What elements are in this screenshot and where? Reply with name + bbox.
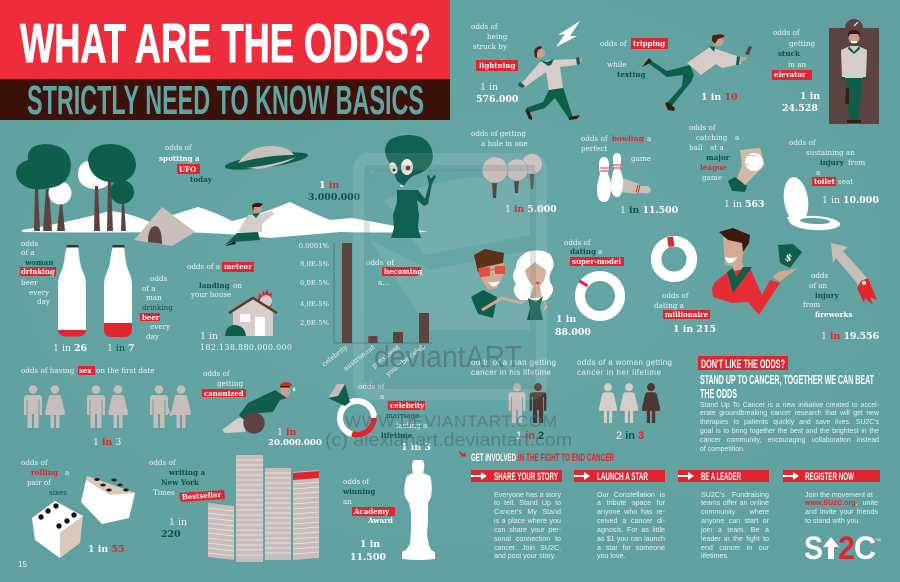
text: bestseller odds: odds of [149,458,177,467]
text: toilet odds: odds of [789,138,817,147]
text: academy award odds: odds [343,477,361,486]
text: tripping odds: 1 in 10 [701,92,738,103]
text: fireworks odds: of an [809,281,828,290]
illustration: firework rocket [831,243,877,305]
text: dice odds: a [65,468,70,477]
text: woman drinking beer: every [29,288,50,297]
text: lightning odds: being [487,32,508,41]
text: man drinking beer: odds [150,274,168,283]
text: meteor odds: on [233,281,242,290]
header bar: be a leader [678,470,769,483]
text: fireworks odds [803,271,880,342]
text: woman drinking beer: woman [24,258,54,267]
text: celebrity marriage odds: celebrity [390,401,425,410]
bar chart: odds of becoming: austronaut [342,343,376,373]
text: academy award odds: winning [342,487,375,496]
text: UFO odds: 3.000.000 [308,192,361,203]
text: bowling odds: odds of [581,134,609,143]
illustration: golf balls on tees [482,154,542,198]
text block: share your story: cancer. Join SU2C, [494,544,561,552]
bar chart: odds of becoming: 8,0E-5% [300,260,330,268]
text block: share your story [494,490,561,560]
text: baseball odds: league [700,163,727,172]
text: dice odds: pair of [27,478,52,487]
text block: be a leader: anyone can start or [701,517,769,525]
text block: launch a star [597,490,665,560]
text block: launch a star: you love. [597,552,625,560]
text: fireworks odds: injury [815,291,840,300]
logo: SU2C: 2 [838,530,855,566]
text: academy award odds: of [362,477,370,486]
text: toilet odds [789,138,879,206]
text: super-model odds: 1 in [556,314,576,325]
text: 1 in 3: 1 in 3 [93,437,121,448]
text block: register now [805,490,878,525]
text block: register now: www.SU2C.org, unite [805,499,878,507]
watermark: deviantart logo frame [353,153,547,400]
heading: get involved: IN THE FIGHT TO END CANCER [518,452,614,464]
illustration: oscar statue [402,460,435,560]
text: becoming odds: a... [378,278,389,287]
text: super-model odds: super-model [572,257,621,266]
header bar: register now [783,470,880,483]
text: tripping odds: odds of [600,39,628,48]
header bar: register now: REGISTER NOW [805,471,854,483]
text block: share your story: can share your per- [494,526,561,534]
text: baseball odds: major [706,153,730,162]
illustration: dice [32,476,135,558]
text: celebrity marriage odds: 1 in 3 [401,442,431,453]
bar chart: odds of becoming: 4,0E-5% [300,300,330,308]
text: lightning odds: lightning [479,61,515,70]
text: woman drinking beer [20,239,87,354]
text: millionaire odds: 1 in 215 [673,324,716,335]
text: super-model odds: a [598,247,603,256]
illustration: man in elevator [829,19,879,124]
text block: be a leader: community where [701,508,769,516]
text: canonized odds: canonized [204,389,244,398]
text block: share your story: and post your story. [494,552,556,560]
text block: be a leader: SU2C's Fundraising [701,490,769,498]
illustration: alien [385,135,436,238]
text: bowling odds: a [647,134,652,143]
text: elevator odds: odds of [773,28,801,37]
text: UFO odds: UFO [179,165,196,174]
text: academy award odds: an [343,497,352,506]
text block: be a leader: teams offer an online [701,499,769,507]
text: UFO odds: 1 in [319,180,339,191]
text: bestseller odds [149,458,225,540]
text: toilet odds: sustaining an [806,148,855,157]
icon: UFO [224,146,309,173]
tent [134,207,195,246]
text: man drinking beer: of a [142,284,156,293]
icon: pair of people 3 [150,385,191,428]
bar chart: odds of becoming [299,242,432,379]
text: celebrity marriage odds: marriage [386,411,419,420]
illustration: donut millionaire [656,237,692,277]
header bar: share your story: SHARE YOUR STORY [494,471,558,483]
text: dice odds: odds of [21,458,49,467]
text: becoming odds [366,258,422,287]
text: meteor odds: your house [190,290,231,299]
text: becoming odds: of [387,258,395,267]
bar chart: odds of becoming: 0.0001% [299,242,330,250]
logo: SU2C: TM [875,537,881,542]
text: celebrity marriage odds [358,382,431,453]
text: academy award odds: 1 in [360,539,380,550]
text: toilet odds: toilet [814,177,836,186]
text: man drinking beer [107,274,173,354]
text block: launch a star: agnosis. For as little [597,526,665,534]
illustration: millionaire man with cash [712,228,802,315]
text: toilet odds: 1 in 10.000 [822,195,879,206]
heading: get involved: GET INVOLVED [471,452,516,464]
text: woman drinking beer: of a [21,248,35,257]
text: academy award odds: Award [367,516,393,525]
text: UFO odds [159,143,361,203]
text: woman drinking beer: day [37,297,51,306]
illustration: diamond ring [328,384,374,435]
text: bowling odds: perfect [581,144,607,153]
text: lightning odds [471,22,519,105]
text block: stand up to cancer paragraph: erate groundbreaking cancer research that will get new [700,410,879,417]
icon: pair of people 1 [24,385,65,428]
text: UFO odds: odds of [165,143,193,152]
text: super-model odds: dating [570,247,596,256]
text block: share your story: sonal connection to [494,535,561,543]
text: baseball odds: catching [696,133,728,142]
text: tripping odds: tripping [633,39,665,48]
header bar: launch a star [574,470,665,483]
bar chart: odds of becoming: celebrity [320,343,349,368]
text: elevator odds: 1 in [800,91,820,102]
text: UFO odds: spotting a [159,154,200,163]
text: page number: 15 [18,560,27,569]
text block: stand up to cancer paragraph [700,402,879,453]
text: millionaire odds [654,291,716,335]
text block: register now: to stand with you. [805,517,860,525]
text: fireworks odds: odds [811,271,829,280]
illustration: book stacks [208,455,319,562]
text: bowling odds: game [631,154,651,163]
text: baseball odds: ball [689,143,703,152]
text: dice odds: sixes [49,488,67,497]
text: meteor odds: odds of a [187,262,221,271]
text block: stand up to cancer paragraph: goal is to bring together the best and the brightest in the [700,428,879,435]
text: meteor odds: landing [199,281,230,290]
text: millionaire odds: millionaire [665,310,709,319]
watermark: url text: WWW.DEVIANTART.COM [345,412,557,431]
text: woman drinking beer: drinking [21,267,55,276]
illustration: snowy landscape with trees [16,144,428,246]
text: super-model odds [555,238,624,338]
text: baseball odds: 1 in 563 [724,199,765,210]
text: celebrity marriage odds: lifetime [381,431,413,440]
text: toilet odds: a [816,168,821,177]
text: meteor odds: 1 in [200,331,218,342]
text: academy award odds [342,477,395,563]
text block: be a leader: leader in the fight to [701,535,769,543]
panel: title banner [0,0,450,123]
logo: SU2C: C [854,530,876,566]
watermark: url text: (c) alexiahart.deviantart.com [325,430,572,450]
panel: don't like the odds heading [698,356,874,401]
text block: share your story: to tell. Stand Up to [494,499,561,507]
tree group left [16,144,72,231]
text block: be a leader: end cancer in our [701,544,769,552]
text: woman drinking beer: beer [21,278,38,287]
text: bestseller odds: writing a [168,468,206,477]
text: 1 in 2: 1 in 2 [516,430,544,442]
text: bestseller odds: 1 in [169,517,187,528]
text: toilet odds: seat [838,177,853,186]
text block: share your story: is a place where you [494,517,561,525]
text: dice odds: 1 in 55 [88,544,124,555]
illustration: millionaire man with cash: $ [783,252,794,265]
text: bestseller odds: Times [153,488,175,497]
text block: stand up to cancer paragraph: Stand Up To Cancer is a new initiative created to accel- [700,402,879,408]
text: bowling odds: bowling [612,134,644,143]
text: canonized odds [202,369,322,448]
text: academy award odds: Academy [353,507,390,516]
text: woman cancer odds: odds of a woman getting [577,358,672,367]
bar chart: odds of becoming: president [370,343,401,370]
illustration: donut super-model [580,276,620,316]
text: tripping odds: while [607,60,627,69]
text: meteor odds: 182.138.880.000.000 [200,343,292,352]
text: academy award odds: 11.500 [350,552,386,563]
text: man drinking beer: drinking [142,303,173,312]
panel: don't like the odds heading: DON'T LIKE THE ODDS? [701,357,785,371]
text: tripping odds: texting [617,70,645,79]
text: sex odds: on the first date [96,366,154,375]
text: millionaire odds: dating a [654,301,685,310]
text: elevator odds [772,28,820,114]
text: lightning odds: 576.000 [476,94,519,105]
text: meteor odds [187,262,292,352]
text block: register now: and invite your friends [805,508,878,516]
text: man drinking beer: man [146,293,162,302]
text: fireworks odds: from [803,300,820,309]
watermark: url text [325,412,572,450]
illustration: man struck by lightning [516,21,582,120]
text: dice odds: rolling [31,468,58,477]
text: meteor odds: meteor [224,262,252,271]
text block: stand up to cancer paragraph: of competition. [700,446,745,453]
text: celebrity marriage odds: lasting a [396,421,428,430]
text block: share your story: Everyone has a story [494,490,561,498]
text: lightning odds: odds of [471,22,499,31]
text: toilet odds: injury [820,158,845,167]
text: hole in one odds: 1 in 5.000 [505,204,557,215]
illustration: dating couple [471,249,554,320]
text: dice odds [21,458,124,555]
text block: be a leader: join a team. Be a [701,526,769,534]
text: hole in one odds: a hole in one [481,139,528,148]
text: canonized odds: 20.000.000 [268,438,322,448]
text: becoming odds: becoming [384,267,422,276]
text: celebrity marriage odds: a [380,392,385,401]
text block: stand up to cancer paragraph: cancer community, encouraging collaboration instead [700,437,879,444]
text: baseball odds: at a [710,143,724,152]
text: woman drinking beer: odds [21,239,39,248]
illustration: bowling pins [597,153,651,202]
text: baseball odds: game [702,173,722,182]
illustration: bottle woman [58,245,86,336]
text: bestseller odds: Bestseller [182,490,222,501]
text: lightning odds: 1 in [480,82,498,93]
illustration: bottle man [104,245,132,337]
text: canonized odds: 1 in [277,427,297,438]
text: baseball odds [689,123,765,210]
text: sex odds: sex [79,366,92,375]
title: WHAT ARE THE ODDS? [20,12,431,74]
text: elevator odds: getting [789,39,816,48]
text: elevator odds: elevator [774,70,806,79]
text: hole in one odds [471,129,557,215]
subtitle: STRICTLY NEED TO KNOW BASICS [27,77,424,123]
text: super-model odds: odds of [564,238,592,247]
text block: launch a star: Our Constellation is [597,490,665,498]
text: 2 in 3: 2 in 3 [616,430,644,442]
bar chart: odds of becoming: 6,0E-5% [300,279,330,287]
icon: woman figures [599,383,660,423]
text: toilet odds: from [848,158,865,167]
text: baseball odds: a [735,133,740,142]
text: elevator odds: stuck [778,49,801,58]
text: bowling odds [581,134,679,216]
text: man drinking beer: every [150,322,171,331]
illustration: kneeling canonized man [222,382,295,434]
heading: get involved [459,451,614,464]
bar chart: odds of becoming: youtube celeb [383,342,428,379]
logo: SU2C: S [804,530,823,566]
logo: SU2C [804,530,881,566]
text block: stand up to cancer paragraph: therapies to patients quickly and save lives. SU2C's [700,419,879,426]
text: canonized odds: getting [217,379,244,388]
text: fireworks odds: 1 in 19.556 [821,331,880,342]
text: becoming odds: odds [366,258,384,267]
text block: be a leader [700,490,769,560]
text: baseball odds: odds of [689,123,717,132]
text block: register now: Join the movement at [805,490,873,498]
text: woman drinking beer: 1 in 26 [53,343,87,354]
text: man cancer odds [471,358,556,377]
text: woman cancer odds: cancer in her lifetime [577,368,662,377]
text: UFO odds: today [190,175,213,184]
text: super-model odds: 88.000 [555,327,591,338]
icon: pair of people 2 [87,385,128,428]
text: man drinking beer: 1 in 7 [107,343,135,354]
text: bowling odds: 1 in 11.500 [620,205,679,216]
text: man cancer odds: odds of a man getting [471,358,556,367]
text: canonized odds: odds of [203,369,231,378]
text block: be a leader: lifetimes. [701,552,729,560]
illustration: man tripping while texting [642,34,752,111]
text block: launch a star: ceived a cancer di- [597,517,665,525]
text: bestseller odds: New York [161,478,200,487]
header bar: launch a star: LAUNCH A STAR [597,471,648,483]
text: elevator odds: in an [788,60,806,69]
text: bestseller odds: 220 [161,529,181,540]
icon: man figures [509,383,546,423]
text: hole in one odds: odds of getting [471,129,526,138]
text: man drinking beer: day [146,332,160,341]
text block: launch a star: as $1 you can launch [597,535,665,543]
text: woman cancer odds [577,358,672,377]
illustration: toilet [781,176,840,231]
text block: launch a star: a tribute space for [597,499,665,507]
text block: launch a star: a star for someone [597,544,665,552]
man kneeling [225,203,274,246]
header bar: share your story [471,470,562,483]
text: lightning odds: struck by [473,42,508,51]
panel: don't like the odds heading: THE ODDS [700,386,737,401]
text: fireworks odds: fireworks [815,310,852,319]
text: celebrity marriage odds: odds of [358,382,386,391]
watermark: deviantart text: deviantART [374,339,522,374]
bar chart: odds of becoming: 2,0E-5% [300,319,330,327]
text: sex odds: odds of having [21,366,75,375]
header bar: be a leader: BE A LEADER [701,471,741,483]
text: man drinking beer: beer [142,313,160,322]
text: man cancer odds: cancer in his lifetime [471,368,552,377]
text: millionaire odds: odds of [662,291,690,300]
illustration: hand catching ball [728,148,765,192]
text block: launch a star: anyone who has re- [597,508,665,516]
text block: share your story: Cancer's My Stand [494,508,561,516]
watermark: deviantart logo interior [370,177,530,330]
text: sex odds [21,366,154,375]
text: elevator odds: 24.528 [782,103,818,114]
text: tripping odds [600,38,738,103]
illustration: house with meteor [225,289,277,336]
tree group right [78,144,136,231]
